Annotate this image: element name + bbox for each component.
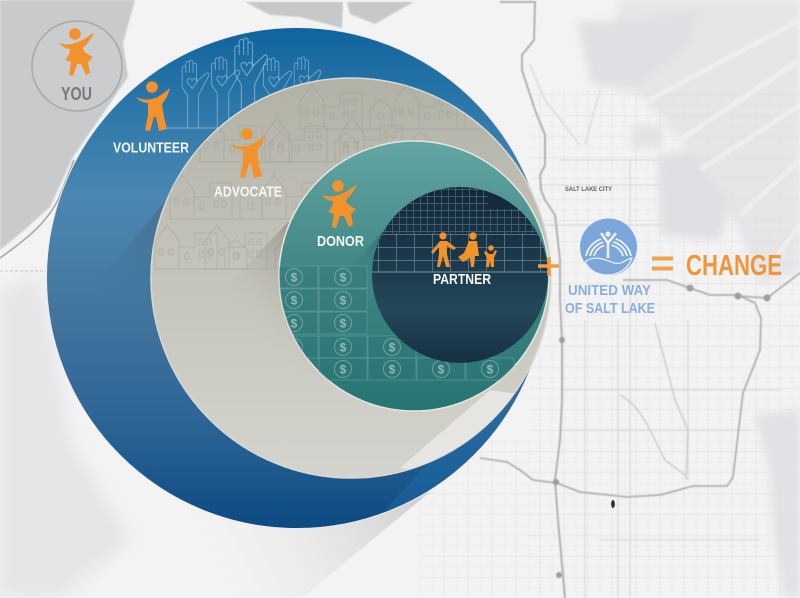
icon: you person	[59, 28, 94, 76]
logo disc	[580, 218, 637, 276]
logo rainbow rings	[586, 238, 631, 256]
long shadow lower	[386, 417, 505, 510]
panel: partner circle	[370, 187, 550, 363]
partner label: PARTNER	[433, 271, 491, 288]
long shadow on map	[170, 492, 430, 598]
icon: volunteer person	[136, 81, 170, 131]
panel: volunteer circle	[46, 28, 548, 528]
icon: donor person	[322, 180, 357, 228]
logo figure	[601, 233, 616, 258]
logo: united way	[580, 218, 637, 276]
western foothills	[0, 275, 130, 598]
logo text	[565, 282, 655, 317]
houses pattern	[155, 85, 487, 269]
icon: family	[431, 232, 497, 267]
icon: raised hands	[165, 38, 321, 128]
icon: advocate person	[231, 128, 265, 178]
you label: YOU	[61, 84, 92, 104]
logo text: OF SALT LAKE	[565, 300, 655, 317]
advocate disc	[151, 78, 551, 478]
donor disc	[279, 141, 549, 411]
volunteer disc	[46, 28, 548, 528]
logo text: UNITED WAY	[568, 282, 651, 299]
logo hand	[585, 258, 632, 275]
shoreline roads	[0, 160, 74, 258]
plus sign	[538, 257, 559, 276]
long shadow	[250, 222, 289, 294]
money pattern	[270, 266, 514, 380]
equals sign	[652, 258, 673, 268]
building grid	[370, 187, 550, 272]
great salt lake	[0, 0, 135, 250]
mountain ridges	[640, 20, 800, 265]
volunteer label: VOLUNTEER	[113, 140, 189, 156]
panel: you	[32, 21, 122, 111]
map streets	[420, 90, 800, 598]
lighter lower strip	[400, 390, 514, 470]
advocate label: ADVOCATE	[214, 184, 282, 200]
long shadow upper	[126, 200, 166, 262]
panel: advocate circle	[151, 78, 560, 480]
you ring	[32, 21, 122, 111]
donor label: DONOR	[317, 233, 364, 250]
long shadow	[364, 232, 383, 258]
city label: SALT LAKE CITY	[565, 186, 613, 193]
small map marker	[611, 500, 615, 508]
northern hills	[245, 2, 414, 28]
panel: donor circle	[270, 141, 549, 411]
mountain terrain	[577, 0, 800, 598]
partner disc	[372, 187, 548, 363]
highways	[480, 2, 800, 598]
